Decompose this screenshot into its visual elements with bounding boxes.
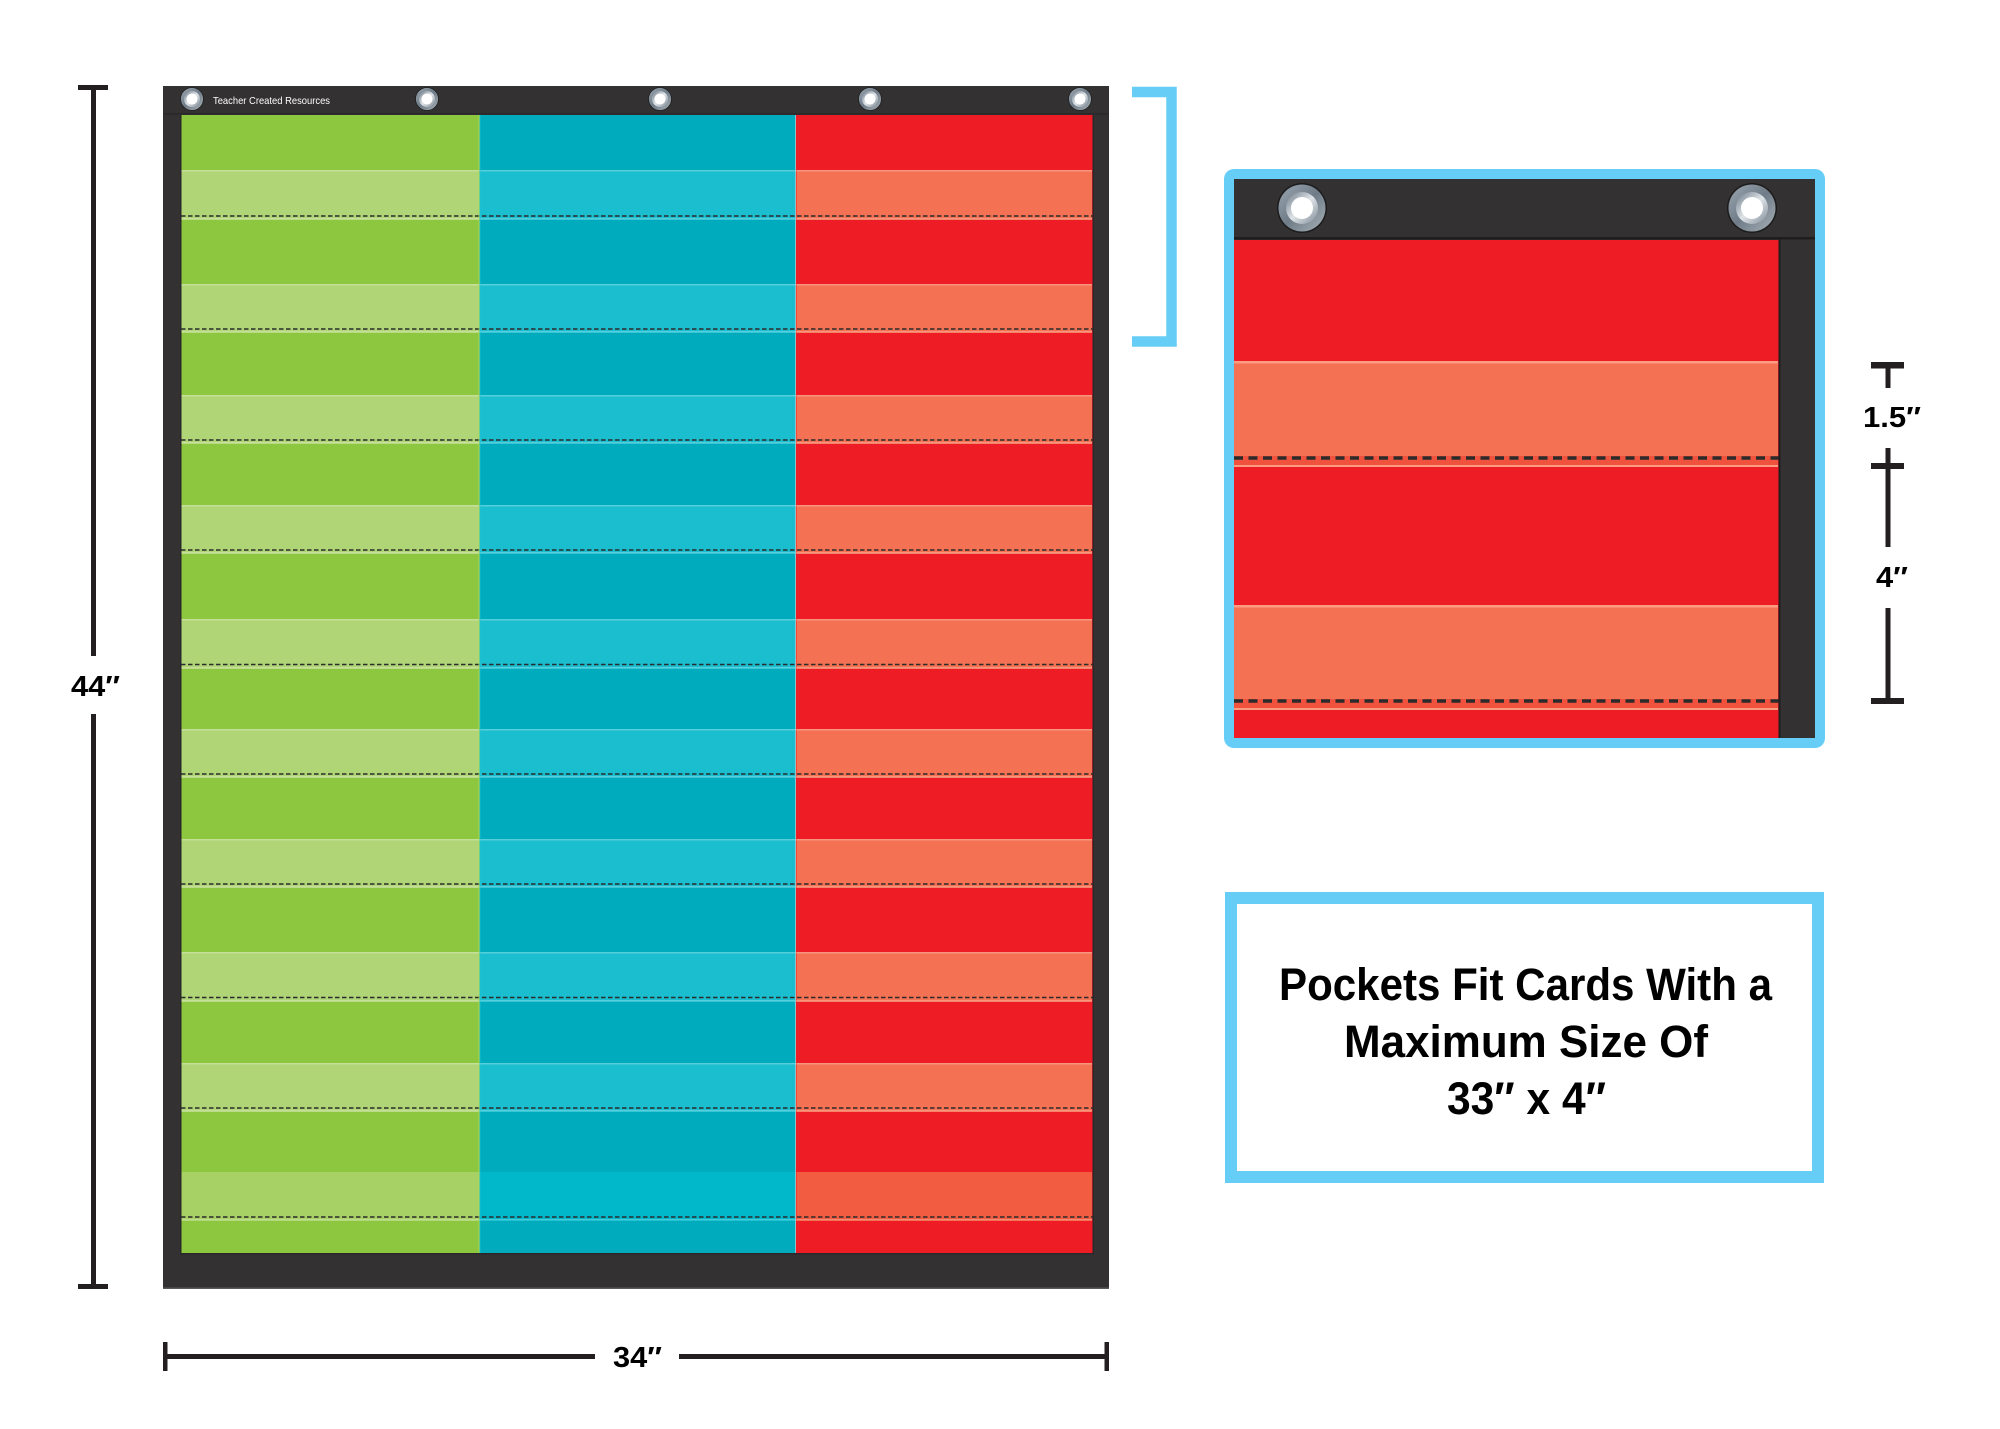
green column — [181, 115, 480, 1254]
callout: maximum card size: Maximum Size Of — [1344, 1016, 1709, 1067]
dimension: 1.5 inch: 1.5″ — [1863, 402, 1921, 434]
grommet 4 — [858, 88, 882, 110]
teal column — [480, 115, 796, 1254]
callout: maximum card size: 33″ x 4″ — [1447, 1073, 1606, 1124]
bracket: detail indicator — [1132, 92, 1172, 342]
dimension: 34 inch width: 34″ — [613, 1342, 662, 1374]
panel: enlarged pocket detail — [1224, 169, 1825, 748]
dimension: 44 inch height — [71, 85, 120, 1289]
detail grommet left — [1277, 183, 1327, 233]
red pocket background — [1234, 240, 1779, 738]
dark backing — [1234, 179, 1815, 738]
dimension: 4 inch: 4″ — [1876, 562, 1908, 594]
callout: maximum card size: Pockets Fit Cards With a — [1279, 959, 1773, 1010]
grommet 2 — [416, 88, 438, 110]
pocket chart: full view — [163, 86, 1109, 1289]
dimension: 1.5 inch — [1863, 362, 1921, 434]
dimension: 44 inch height: 44″ — [71, 671, 120, 703]
grommet 3 — [648, 88, 672, 110]
callout: maximum card size — [1231, 898, 1818, 1177]
detail grommet right — [1727, 183, 1777, 233]
red column — [796, 115, 1093, 1254]
chart backing panel — [163, 86, 1109, 1289]
pocket 2 — [1234, 605, 1779, 710]
grommet 5 — [1068, 88, 1092, 110]
blue detail frame — [1224, 169, 1825, 748]
grommet 1 — [180, 88, 204, 110]
dimension: 34 inch width — [163, 1342, 1109, 1374]
pocket 1 — [1234, 361, 1779, 467]
pocket seams and stitching — [163, 113, 1109, 1289]
brand text: Teacher Created Resources — [213, 95, 330, 107]
shadow edges — [1234, 237, 1815, 738]
dimension: 4 inch — [1871, 448, 1908, 704]
